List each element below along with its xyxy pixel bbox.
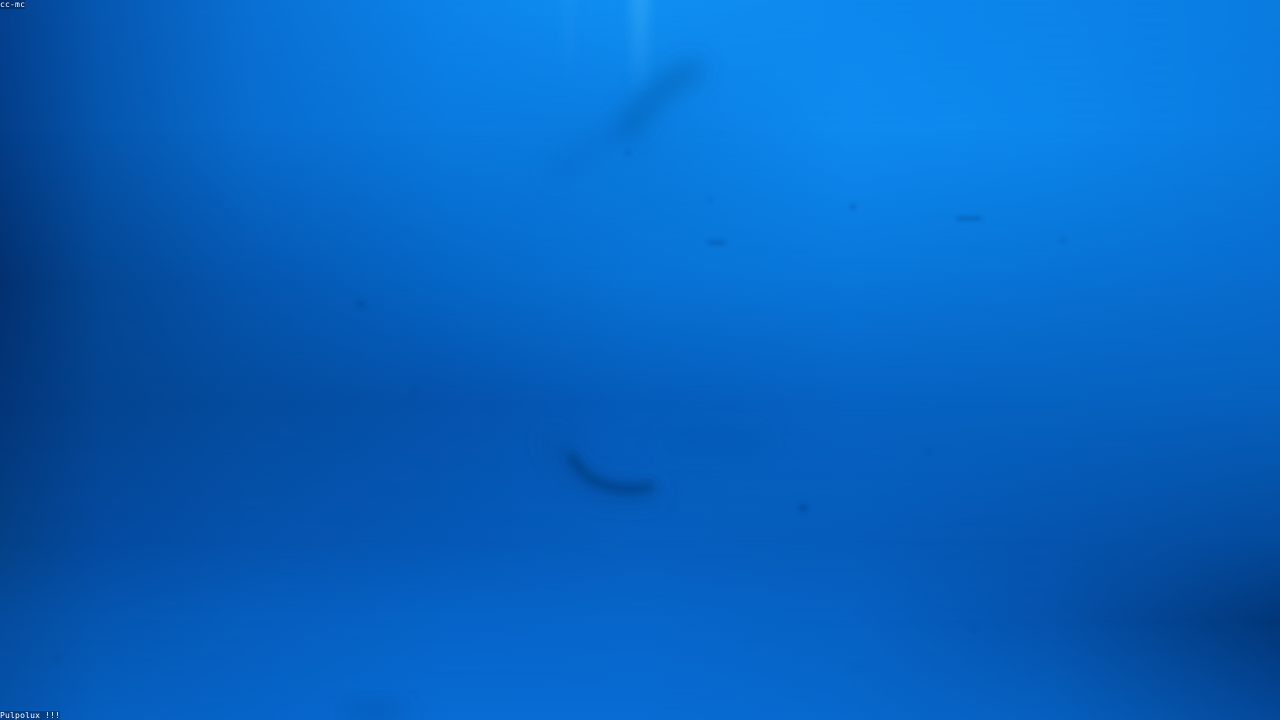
caption: top-left stamp: cc-mc bbox=[0, 0, 25, 9]
dark shadow streak upper centre bbox=[556, 70, 694, 172]
caption: bottom-left stamp: Pulpolux !!! bbox=[0, 711, 60, 720]
pale light streaks at top bbox=[563, 0, 649, 100]
dim shape at bottom edge bbox=[339, 702, 411, 720]
thin horizontal flecks bbox=[708, 217, 981, 668]
dark crescent shape lower centre bbox=[552, 428, 775, 494]
small specks bbox=[54, 150, 1066, 661]
